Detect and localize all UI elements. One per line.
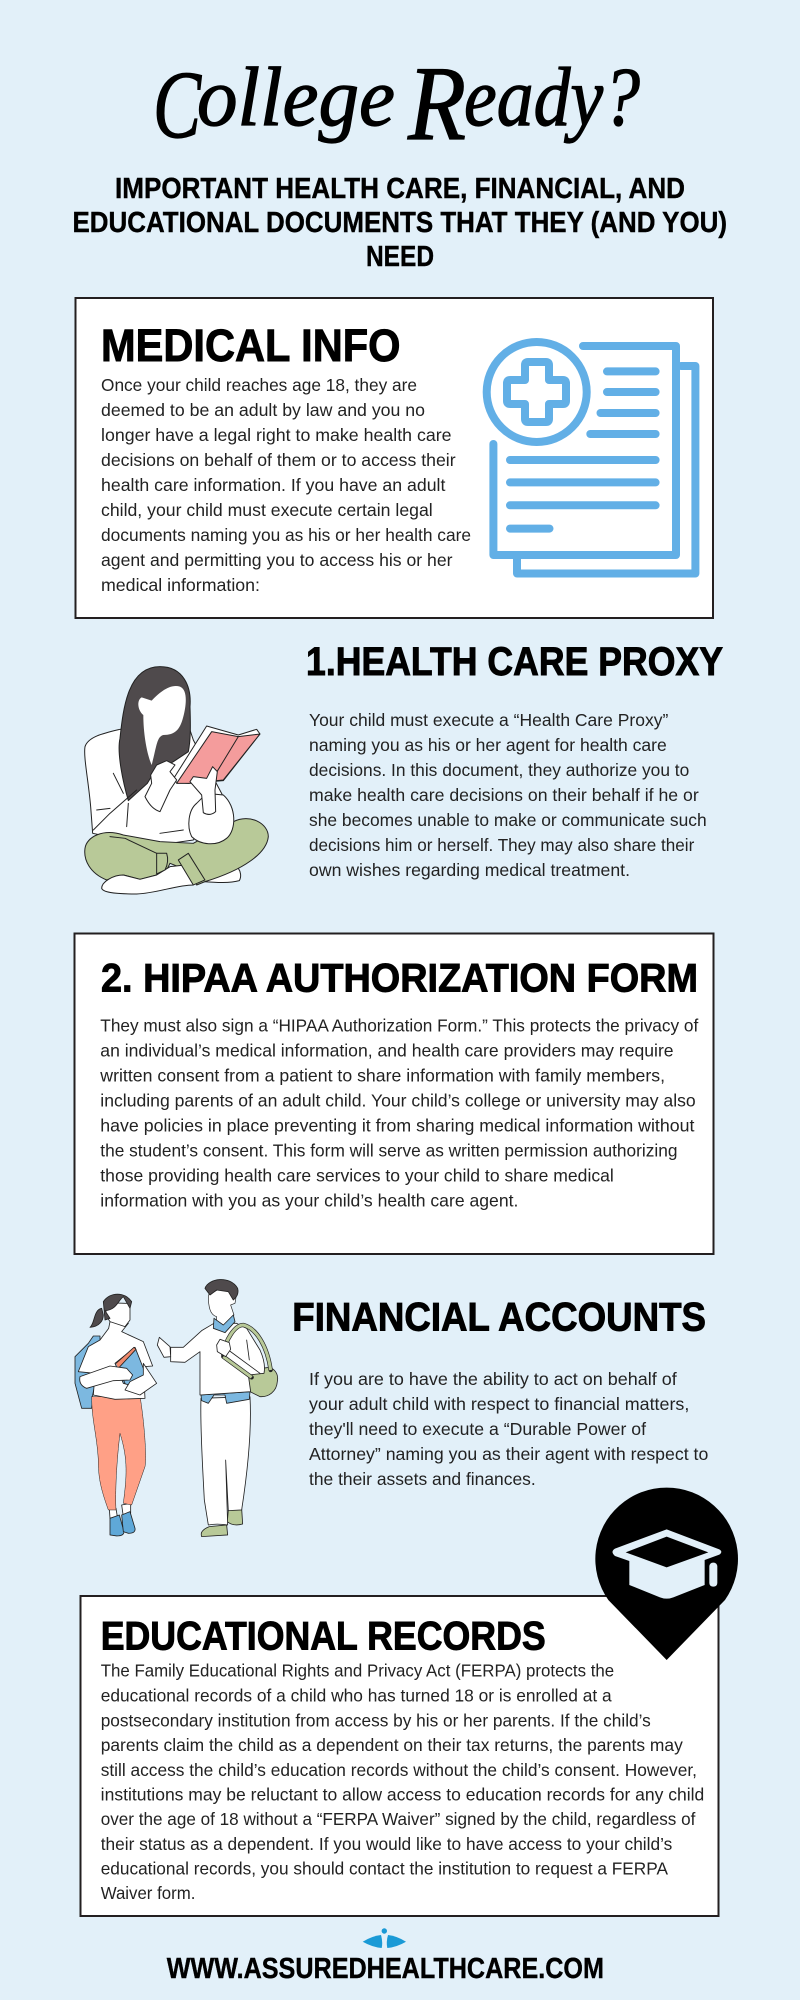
- title: C: [153, 51, 202, 158]
- subtitle: EDUCATIONAL DOCUMENTS THAT THEY (AND YOU): [72, 207, 727, 239]
- heading: HIPAA authorization form: 2. HIPAA AUTHORIZATION FORM: [101, 957, 698, 1001]
- text: educational records body: [101, 1661, 704, 1903]
- text: educational records body: their status as a dependent. If you would like to have access to your child’s: [101, 1834, 673, 1854]
- text: medical info body: child, your child must execute certain legal: [101, 500, 433, 520]
- text: HIPAA body: [99, 1016, 698, 1211]
- subtitle: IMPORTANT HEALTH CARE, FINANCIAL, AND: [115, 173, 685, 205]
- illustration: two students talking: [75, 1280, 278, 1537]
- text: HIPAA body: information with you as your child’s health care agent.: [100, 1191, 518, 1211]
- text: health care proxy body: naming you as his or her agent for health care: [309, 735, 667, 755]
- text: medical info body: longer have a legal right to make health care: [101, 425, 452, 445]
- heading: health care proxy: 1.HEALTH CARE PROXY: [306, 640, 723, 684]
- text: HIPAA body: the student’s consent. This form will serve as written permission authorizing: [100, 1141, 678, 1161]
- text: medical info body: deemed to be an adult by law and you no: [101, 400, 425, 420]
- icon: graduation cap map pin: [595, 1488, 738, 1660]
- text: medical info body: decisions on behalf of them or to access their: [101, 450, 456, 470]
- text: medical info body: Once your child reaches age 18, they are: [101, 375, 417, 395]
- text: HIPAA body: those providing health care services to your child to share medical: [100, 1166, 614, 1186]
- logo: assured health care: [363, 1928, 406, 1948]
- text: HIPAA body: an individual’s medical information, and health care providers may require: [100, 1041, 674, 1061]
- text: health care proxy body: Your child must execute a “Health Care Proxy”: [309, 710, 668, 730]
- text: financial accounts body: the their assets and finances.: [309, 1469, 536, 1489]
- subtitle: [72, 173, 727, 273]
- panel: HIPAA authorization form: [74, 934, 714, 1254]
- text: health care proxy body: own wishes regarding medical treatment.: [309, 860, 630, 880]
- text: health care proxy body: decisions him or herself. They may also share their: [309, 835, 694, 855]
- icon: medical documents: [487, 342, 695, 574]
- text: educational records body: still access the child’s education records without the child’s consent. However,: [101, 1760, 697, 1780]
- text: educational records body: parents claim the child as a dependent on their tax returns, the parents may: [101, 1735, 683, 1755]
- text: educational records body: institutions may be reluctant to allow access to education records for any child: [101, 1785, 704, 1805]
- subtitle: NEED: [366, 241, 434, 273]
- text: HIPAA body: They must also sign a “HIPAA Authorization Form.” This protects the privacy of: [100, 1016, 698, 1036]
- heading: educational records: EDUCATIONAL RECORDS: [101, 1614, 546, 1658]
- text: educational records body: postsecondary institution from access by his or her parents. If the child’s: [101, 1711, 651, 1731]
- text: HIPAA body: have policies in place preventing it from sharing medical information without: [100, 1116, 695, 1136]
- text: financial accounts body: they'll need to execute a “Durable Power of: [309, 1419, 646, 1439]
- text: medical info body: documents naming you as his or her health care: [101, 525, 471, 545]
- text: educational records body: educational records, you should contact the institution to request a FERPA: [101, 1859, 668, 1879]
- title: R: [407, 45, 466, 162]
- text: health care proxy body: she becomes unable to make or communicate such: [309, 810, 707, 830]
- text: health care proxy body: make health care decisions on their behalf if he or: [309, 785, 699, 805]
- text: health care proxy body: [309, 710, 707, 880]
- title: [153, 45, 640, 162]
- title: eady?: [464, 51, 640, 144]
- text: financial accounts body: If you are to have the ability to act on behalf of: [309, 1369, 677, 1389]
- text: financial accounts body: Attorney” naming you as their agent with respect to: [309, 1444, 708, 1464]
- text: educational records body: Waiver form.: [101, 1883, 195, 1903]
- text: financial accounts body: your adult child with respect to financial matters,: [309, 1394, 689, 1414]
- text: educational records body: over the age of 18 without a “FERPA Waiver” signed by the child, regardless of: [101, 1809, 696, 1829]
- text: medical info body: medical information:: [101, 575, 260, 595]
- footer: website address: WWW.ASSUREDHEALTHCARE.COM: [167, 1953, 604, 1985]
- text: financial accounts body: [309, 1369, 708, 1489]
- heading: financial accounts: FINANCIAL ACCOUNTS: [292, 1296, 706, 1340]
- text: HIPAA body: written consent from a patient to share information with family members,: [99, 1066, 665, 1086]
- heading: medical info: MEDICAL INFO: [101, 320, 400, 371]
- text: medical info body: [101, 375, 471, 595]
- text: educational records body: educational records of a child who has turned 18 or is enrolled at a: [101, 1686, 612, 1706]
- panel: educational records: [80, 1596, 718, 1916]
- text: HIPAA body: including parents of an adult child. Your child’s college or university may also: [100, 1091, 696, 1111]
- illustration: girl reading a book: [85, 667, 268, 894]
- text: medical info body: agent and permitting you to access his or her: [101, 550, 453, 570]
- text: educational records body: The Family Educational Rights and Privacy Act (FERPA) protects the: [101, 1661, 614, 1681]
- text: health care proxy body: decisions. In this document, they authorize you to: [309, 760, 689, 780]
- text: medical info body: health care information. If you have an adult: [101, 475, 446, 495]
- panel: medical info: [76, 298, 713, 618]
- title: ollege: [197, 51, 395, 144]
